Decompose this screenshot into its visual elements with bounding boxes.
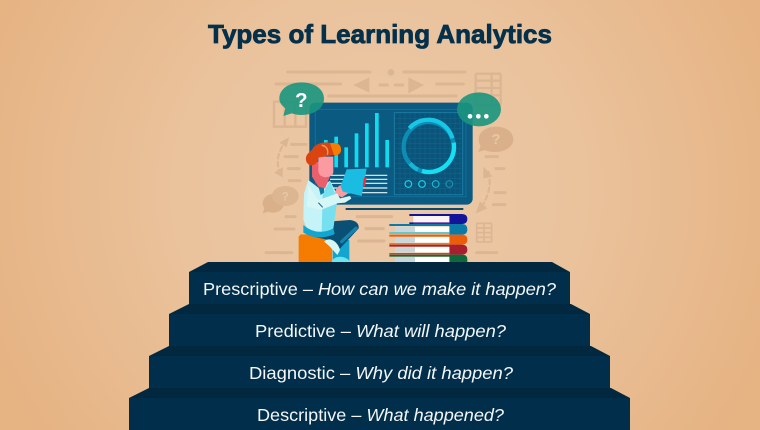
step: descriptive: Descriptive – What happened?: [257, 405, 504, 425]
bar chart: [324, 113, 389, 167]
shin: [333, 240, 349, 262]
icon: question bubble right: [478, 127, 513, 152]
text lines on screen: [330, 175, 387, 193]
step: prescriptive: [189, 262, 570, 304]
step: predictive: [169, 304, 590, 346]
person seated with tablet: [299, 142, 367, 262]
book 2: [389, 224, 467, 235]
hair: [306, 142, 341, 165]
forearm and hand: [335, 184, 349, 197]
step: descriptive: [129, 388, 630, 430]
tablet: [341, 169, 367, 196]
icon: table bottom right: [477, 223, 492, 242]
book 3: [389, 235, 467, 245]
speech bubble: question: ?: [295, 89, 308, 112]
step: prescriptive: Prescriptive – How can we make it happen?: [203, 279, 556, 299]
icon: table top right: [476, 74, 501, 105]
dashboard grid panel: [394, 113, 463, 195]
neck and face: [312, 162, 330, 188]
icon: question bubble left: [263, 186, 299, 213]
stack of books: [389, 214, 467, 262]
icon: bar outline left: [274, 102, 306, 127]
speech bubble: dots: [457, 92, 501, 126]
foot: [332, 257, 350, 262]
step: predictive: Predictive – What will happen?: [255, 321, 506, 341]
icon: double arrow: [274, 69, 493, 213]
title: Types of Learning Analytics: [208, 19, 552, 49]
background line icons: [266, 72, 505, 253]
illustration: analyst with dashboard: [263, 69, 513, 262]
step: diagnostic: [149, 346, 610, 388]
step: diagnostic: Diagnostic – Why did it happen?: [249, 363, 513, 383]
knee cuff: [324, 239, 340, 255]
book 4: [389, 245, 467, 255]
icon: question bubble right: ?: [492, 132, 501, 148]
stool: [299, 234, 332, 262]
thigh: [313, 220, 359, 249]
donut chart: [404, 120, 454, 172]
speech bubble: question: [279, 82, 324, 116]
monitor stand line: [346, 206, 463, 212]
book 1: [409, 214, 467, 224]
indicator circles: [405, 181, 453, 187]
shirt: [303, 180, 337, 234]
collar: [318, 186, 324, 195]
icon: question bubble left: ?: [282, 189, 289, 203]
monitor: [309, 103, 473, 205]
book 5: [389, 255, 467, 262]
staircase: [129, 262, 630, 430]
